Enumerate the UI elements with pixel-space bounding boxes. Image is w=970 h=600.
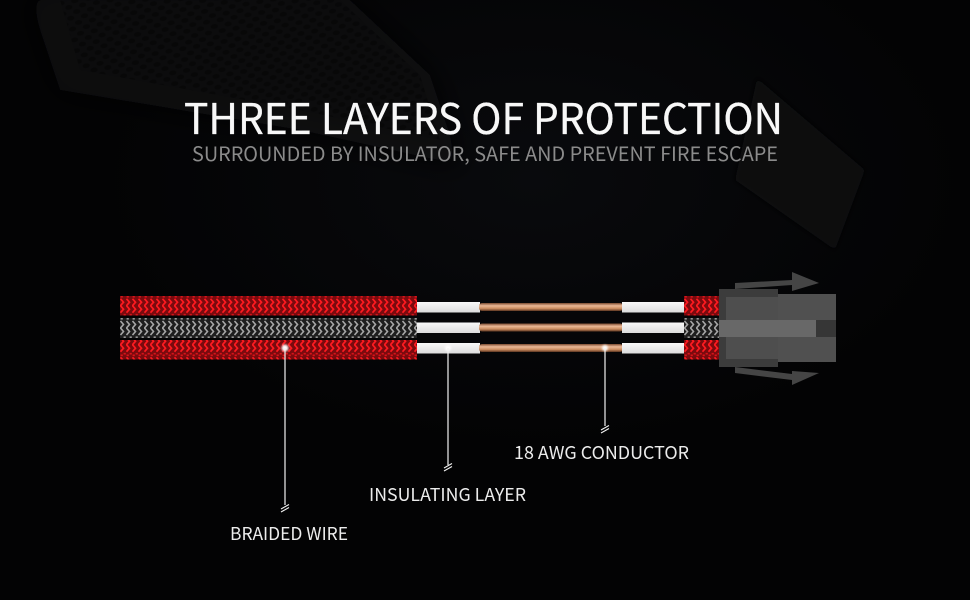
callout: braided wire [230,344,348,546]
white insulation, right section [622,302,684,354]
callout: insulating layer [369,345,526,507]
copper conductors [479,303,623,352]
subtitle: SURROUNDED BY INSULATOR, SAFE AND PREVENT FIRE ESCAPE [192,138,778,167]
braided sleeves, right section [684,296,720,360]
callout: 18 AWG conductor [514,345,689,465]
callout: braided wire: BRAIDED WIRE [230,520,348,546]
braided sleeves, left section [120,296,417,360]
callout: 18 AWG conductor: 18 AWG CONDUCTOR [514,439,689,465]
cable diagram [120,272,836,385]
callout: insulating layer: INSULATING LAYER [369,481,526,507]
title: THREE LAYERS OF PROTECTION [184,86,783,147]
connector plug [719,272,836,385]
white insulation, left section [417,302,480,354]
